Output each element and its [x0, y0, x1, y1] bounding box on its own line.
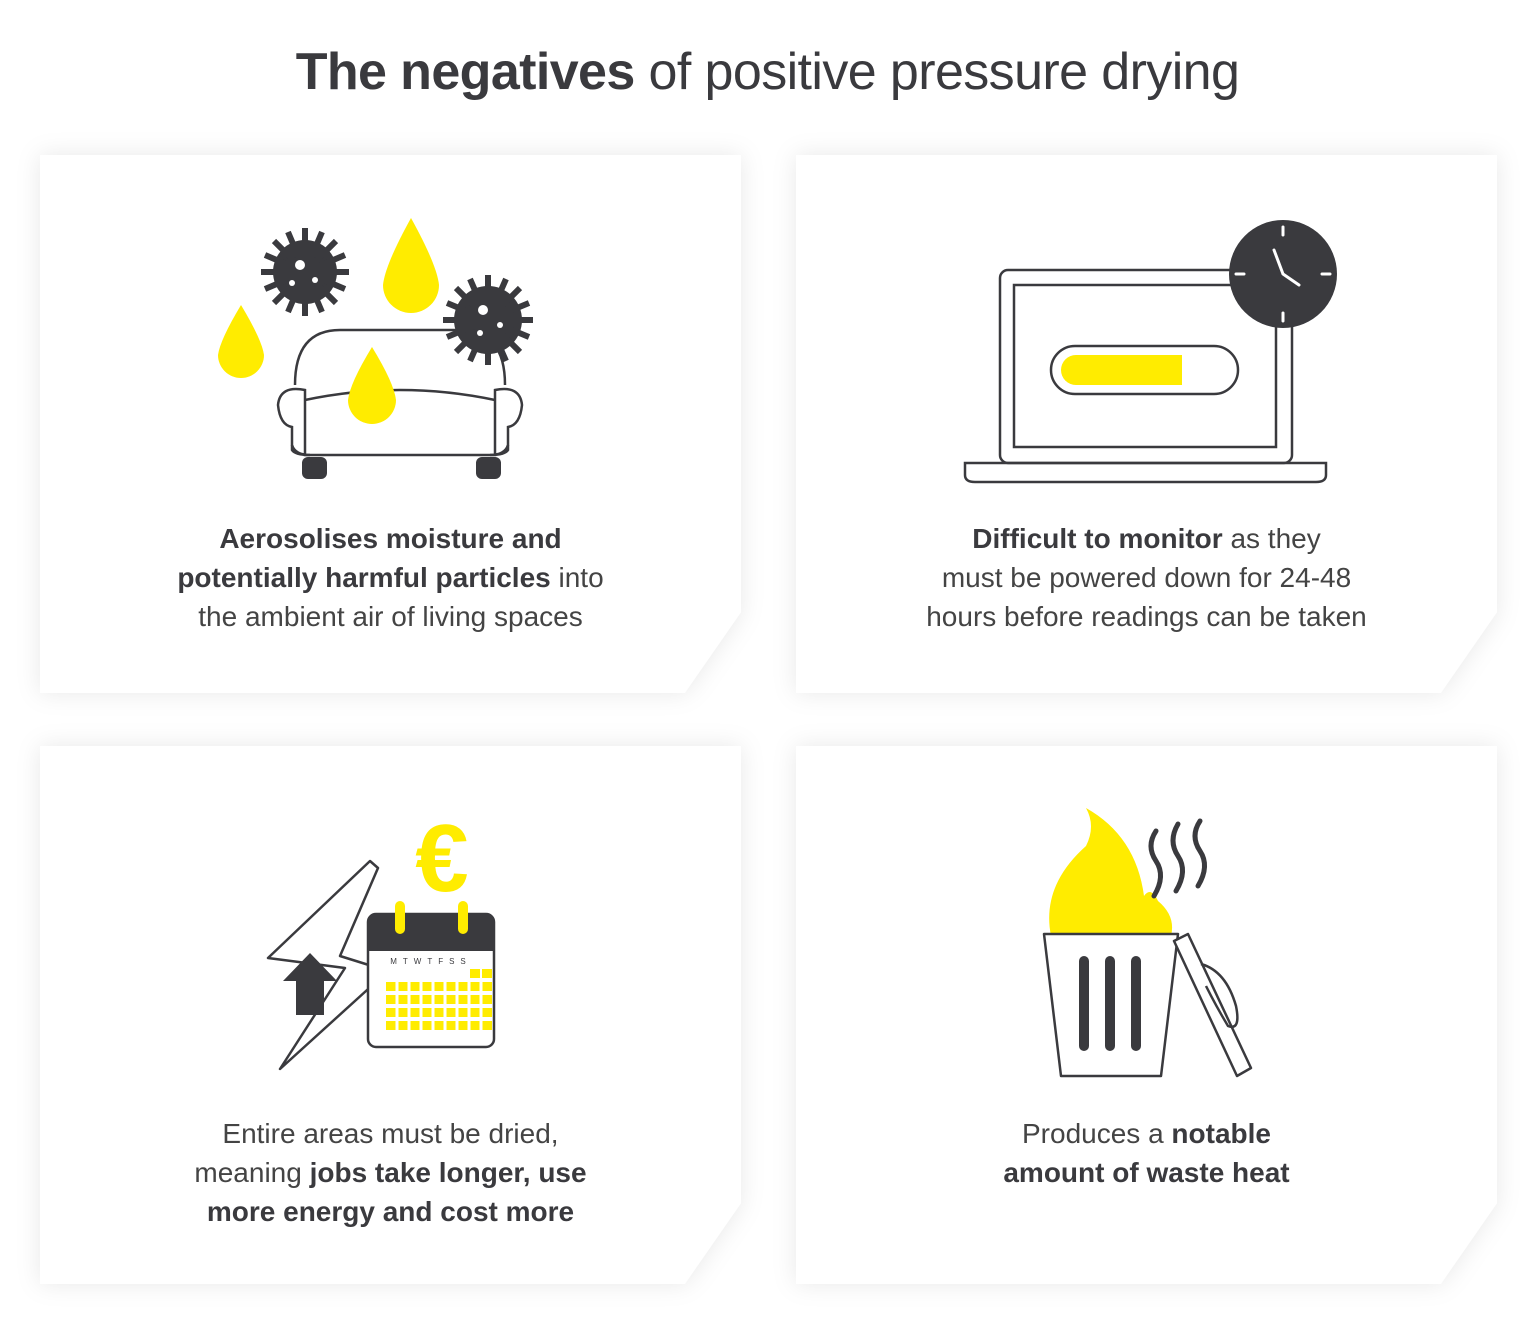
panel: jobs longer: [36, 742, 745, 1288]
icon: bin with flame and heat: [1042, 808, 1252, 1078]
text: aerosolises: the ambient air of living spaces: [198, 601, 583, 632]
text: jobs longer: meaning jobs take longer, use: [194, 1157, 587, 1188]
text: monitoring: hours before readings can be taken: [926, 601, 1367, 632]
icon: lightning, calendar, euro: €: [415, 805, 469, 912]
text: aerosolises: Aerosolises moisture and: [219, 523, 562, 554]
icon: laptop with clock: [964, 220, 1337, 484]
text: waste heat: amount of waste heat: [1003, 1157, 1290, 1188]
icon: sofa with droplets and germs: [218, 218, 533, 479]
text: monitoring: Difficult to monitor as they: [972, 523, 1321, 554]
icon: lightning, calendar, euro: [266, 805, 496, 1070]
text: jobs longer: Entire areas must be dried,: [222, 1118, 559, 1149]
title: The negatives of positive pressure drying: [296, 43, 1239, 101]
panel: monitoring: [792, 151, 1501, 697]
text: aerosolises: potentially harmful particles into: [177, 562, 604, 593]
panel: waste heat: [792, 742, 1501, 1288]
text: waste heat: Produces a notable: [1022, 1118, 1271, 1149]
icon: lightning, calendar, euro: MTWTFSS: [390, 957, 472, 966]
text: jobs longer: [194, 1118, 587, 1227]
panel: aerosolises: [36, 151, 745, 697]
text: monitoring: must be powered down for 24-48: [942, 562, 1351, 593]
text: jobs longer: more energy and cost more: [207, 1196, 574, 1227]
text: monitoring: [926, 523, 1367, 632]
text: aerosolises: [177, 523, 604, 632]
text: waste heat: [1003, 1118, 1290, 1188]
